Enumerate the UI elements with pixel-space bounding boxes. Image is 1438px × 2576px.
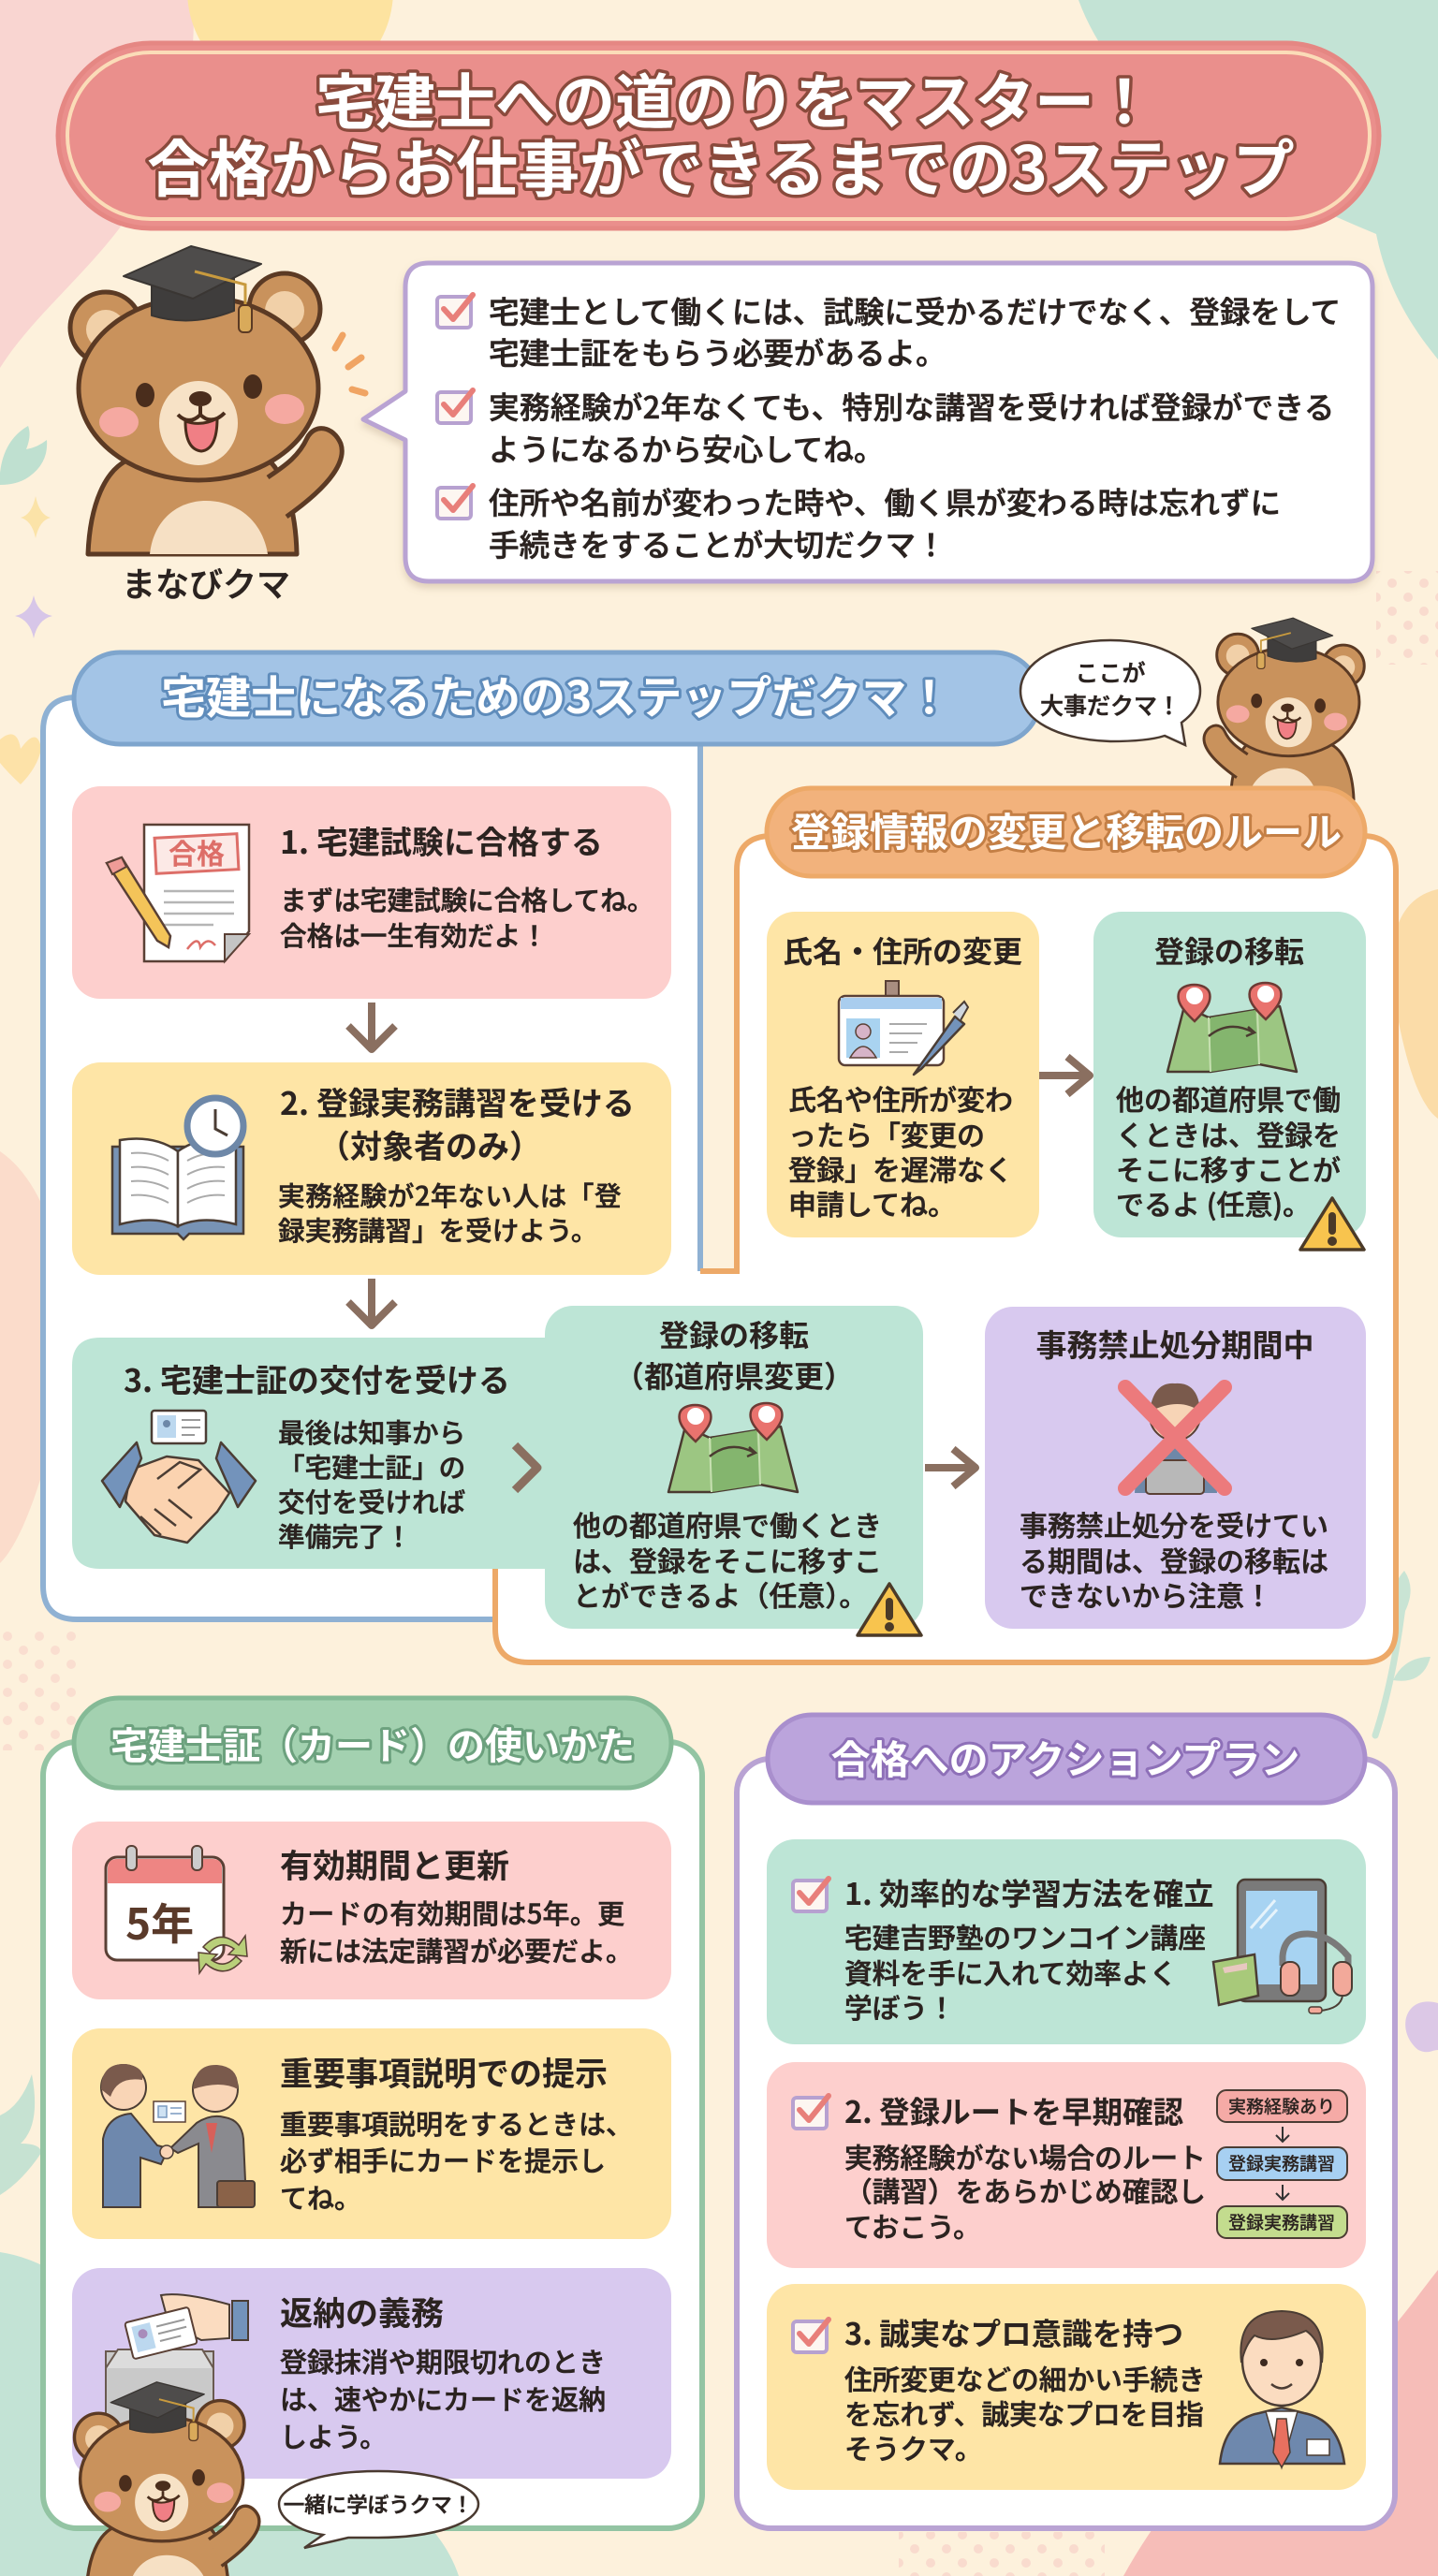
step 2 card: [72, 1062, 671, 1275]
heading: license card usage: 宅建士証（カード）の使いかた: [110, 1716, 635, 1770]
icon: book and clock: [112, 1098, 243, 1239]
heading: registration rules: 登録情報の変更と移転のルール: [791, 801, 1342, 858]
step 3 card: [72, 1338, 562, 1569]
icon: checkbox: [793, 2320, 829, 2352]
panel: license card usage: [43, 1698, 702, 2528]
card: name and address change: ったら「変更の: [788, 1113, 985, 1154]
step 3 card: 最後は知事から: [278, 1412, 465, 1451]
step 1 card: まずは宅建試験に合格してね。: [280, 880, 653, 918]
check item 2: ようになるから安心してね。: [489, 426, 885, 470]
card: presenting the card: [72, 2028, 671, 2239]
heading: license card usage: [74, 1698, 671, 1788]
speech bubble: ここが大事だクマ: ここが: [1075, 655, 1146, 689]
step 1 card: 1. 宅建試験に合格する: [280, 817, 603, 863]
panel: action plan: [737, 1715, 1395, 2528]
icon: warning: [858, 1584, 921, 1635]
action 3: を忘れず、誠実なプロを目指: [844, 2393, 1204, 2433]
flow chart: registration route: [1217, 2090, 1347, 2238]
step 3 card: 準備完了！: [278, 1516, 412, 1555]
action 1: 資料を手に入れて効率よく: [844, 1952, 1177, 1992]
action 3: [767, 2284, 1366, 2490]
card: suspension period: る期間は、登録の移転は: [1020, 1539, 1328, 1580]
action 2: 2. 登録ルートを早期確認: [844, 2088, 1183, 2132]
card: presenting the card: 重要事項説明での提示: [280, 2048, 608, 2096]
check item 1: [437, 288, 1341, 373]
card: registration transfer: 登録の移転: [1154, 929, 1304, 972]
icon: ID badge and pen: [839, 981, 968, 1075]
arrow: transfer to suspension: [925, 1449, 976, 1486]
action 2: [767, 2062, 1366, 2268]
icon: tablet, book and headset: [1213, 1880, 1352, 2013]
arrow: change to transfer: [1039, 1057, 1090, 1094]
heading: action plan: 合格へのアクションプラン: [831, 1729, 1299, 1786]
heading: action plan: [768, 1715, 1365, 1803]
title banner: [58, 43, 1379, 228]
card: suspension period: 事務禁止処分期間中: [1035, 1321, 1314, 1366]
speech bubble: 一緒に学ぼうクマ: [279, 2471, 478, 2548]
mascot bear with name: まなびクマ: [122, 558, 290, 607]
card: validity and renewal: カードの有効期間は5年。更: [280, 1893, 624, 1932]
chevron arrow: [515, 1445, 537, 1490]
card: registration transfer (prefecture change): は、登録をそこに移すこ: [573, 1539, 882, 1580]
arrow: step 2 to 3: [348, 1279, 395, 1325]
check item 2: [437, 384, 1335, 470]
step 3 card: 「宅建士証」の: [278, 1447, 465, 1486]
heading: 3 steps: 宅建士になるための3ステップだクマ！: [161, 661, 951, 726]
icon: map: [668, 1403, 798, 1492]
intro speech bubble: [363, 263, 1372, 581]
card: registration transfer: そこに移すことが: [1116, 1148, 1341, 1189]
card: return obligation: しよう。: [280, 2416, 387, 2455]
card: validity and renewal: 新には法定講習が必要だよ。: [280, 1930, 633, 1969]
speech bubble: ここが大事だクマ: 大事だクマ！: [1040, 688, 1181, 722]
action 1: 学ぼう！: [844, 1986, 956, 2027]
card: suspension period: できないから注意！: [1020, 1573, 1272, 1615]
card: validity and renewal: [72, 1822, 671, 1999]
arrow: step 1 to 2: [348, 1003, 395, 1049]
panel: registration rules: [495, 836, 1396, 1662]
card: presenting the card: 重要事項説明をするときは、: [280, 2103, 633, 2143]
card: validity and renewal: 有効期間と更新: [280, 1840, 509, 1888]
action 2: 実務経験がない場合のルート: [844, 2136, 1206, 2176]
panel: 3 steps: [43, 697, 700, 1619]
check item 2: 実務経験が2年なくても、特別な講習を受ければ登録ができる: [489, 384, 1335, 428]
action 2: （講習）をあらかじめ確認し: [844, 2170, 1206, 2210]
step 2 card: 録実務講習」を受けよう。: [278, 1210, 597, 1249]
bottom bear: [75, 2382, 259, 2576]
card: return obligation: [72, 2268, 671, 2479]
heading: registration rules: [767, 788, 1365, 876]
card: registration transfer (prefecture change): 他の都道府県で働くとき: [573, 1503, 882, 1544]
card: name and address change: 氏名や住所が変わ: [788, 1077, 1013, 1119]
card: name and address change: [767, 912, 1039, 1237]
step 2 card: 実務経験が2年ない人は「登: [278, 1176, 622, 1214]
action 3: 3. 誠実なプロ意識を持つ: [844, 2310, 1183, 2354]
action 1: [767, 1839, 1366, 2044]
icon: handshake and card: [102, 1411, 256, 1543]
flow chart: registration route: 実務経験あり: [1228, 2093, 1335, 2118]
title banner: 合格からお仕事ができるまでの3ステップ: [147, 120, 1295, 210]
card: registration transfer: [1093, 912, 1366, 1250]
step 1 card: 合格は一生有効だよ！: [280, 915, 548, 954]
icon: warning: [1300, 1198, 1364, 1250]
card: registration transfer (prefecture change): [545, 1306, 923, 1635]
check item 3: [437, 479, 1281, 565]
step 3 card: 3. 宅建士証の交付を受ける: [124, 1355, 510, 1401]
flow chart: registration route: 登録実務講習: [1228, 2209, 1335, 2234]
card: name and address change: 氏名・住所の変更: [783, 929, 1022, 972]
card: return obligation: 返納の義務: [280, 2288, 444, 2335]
card: registration transfer (prefecture change): （都道府県変更）: [614, 1354, 854, 1397]
icon: 5 year calendar: 5年: [125, 1891, 194, 1953]
card: registration transfer (prefecture change): とができるよ（任意）。: [573, 1573, 867, 1615]
small bear top right: [1204, 618, 1364, 799]
check item 1: 宅建士証をもらう必要があるよ。: [489, 329, 946, 373]
icon: returning card into box: [106, 2294, 248, 2436]
step 2 card: （対象者のみ）: [318, 1121, 541, 1167]
icon: pass certificate and pencil: 合格: [169, 831, 225, 872]
action 3: そうクマ。: [844, 2427, 983, 2467]
icon: checkbox: [793, 1879, 829, 1911]
card: presenting the card: 必ず相手にカードを提示し: [280, 2140, 606, 2179]
icon: map: [1167, 983, 1297, 1072]
card: suspension period: 事務禁止処分を受けてい: [1020, 1503, 1328, 1544]
card: registration transfer: でるよ (任意)。: [1116, 1182, 1311, 1223]
card: return obligation: は、速やかにカードを返納: [280, 2378, 606, 2418]
action 1: 宅建吉野塾のワンコイン講座: [844, 1916, 1206, 1956]
card: return obligation: 登録抹消や期限切れのとき: [280, 2341, 606, 2380]
check item 1: 宅建士として働くには、試験に受かるだけでなく、登録をして: [489, 288, 1341, 332]
step 1 card: [72, 786, 671, 999]
step 2 card: 2. 登録実務講習を受ける: [280, 1078, 635, 1124]
check item 3: 住所や名前が変わった時や、働く県が変わる時は忘れずに: [489, 479, 1281, 523]
icon: professional in suit: [1220, 2311, 1344, 2467]
speech bubble: ここが大事だクマ: [1020, 640, 1200, 745]
card: registration transfer: 他の都道府県で働: [1116, 1077, 1341, 1119]
card: suspension period: [985, 1307, 1366, 1629]
action 2: ておこう。: [844, 2205, 981, 2246]
icon: 5 year calendar: [106, 1846, 247, 1973]
card: name and address change: 申請してね。: [788, 1182, 956, 1223]
heading: 3 steps: [74, 652, 1040, 744]
title banner: 宅建士への道のりをマスター！: [315, 55, 1154, 141]
flow chart: registration route: 登録実務講習: [1228, 2150, 1335, 2175]
card: name and address change: 登録」を遅滞なく: [788, 1148, 1013, 1189]
card: registration transfer: くときは、登録を: [1116, 1113, 1341, 1154]
mascot bear with name: [70, 246, 365, 607]
check item 3: 手続きをすることが大切だクマ！: [489, 521, 946, 565]
card: registration transfer (prefecture change): 登録の移転: [659, 1312, 809, 1355]
action 3: 住所変更などの細かい手続き: [844, 2358, 1206, 2398]
step 3 card: 交付を受ければ: [278, 1482, 465, 1520]
card: presenting the card: てね。: [280, 2177, 361, 2217]
icon: two business people: [101, 2064, 255, 2207]
icon: person with cross: [1125, 1383, 1225, 1494]
icon: pass certificate and pencil: [107, 825, 249, 961]
icon: checkbox: [793, 2096, 829, 2129]
speech bubble: 一緒に学ぼうクマ: 一緒に学ぼうクマ！: [284, 2489, 473, 2519]
action 1: 1. 効率的な学習方法を確立: [844, 1870, 1214, 1914]
